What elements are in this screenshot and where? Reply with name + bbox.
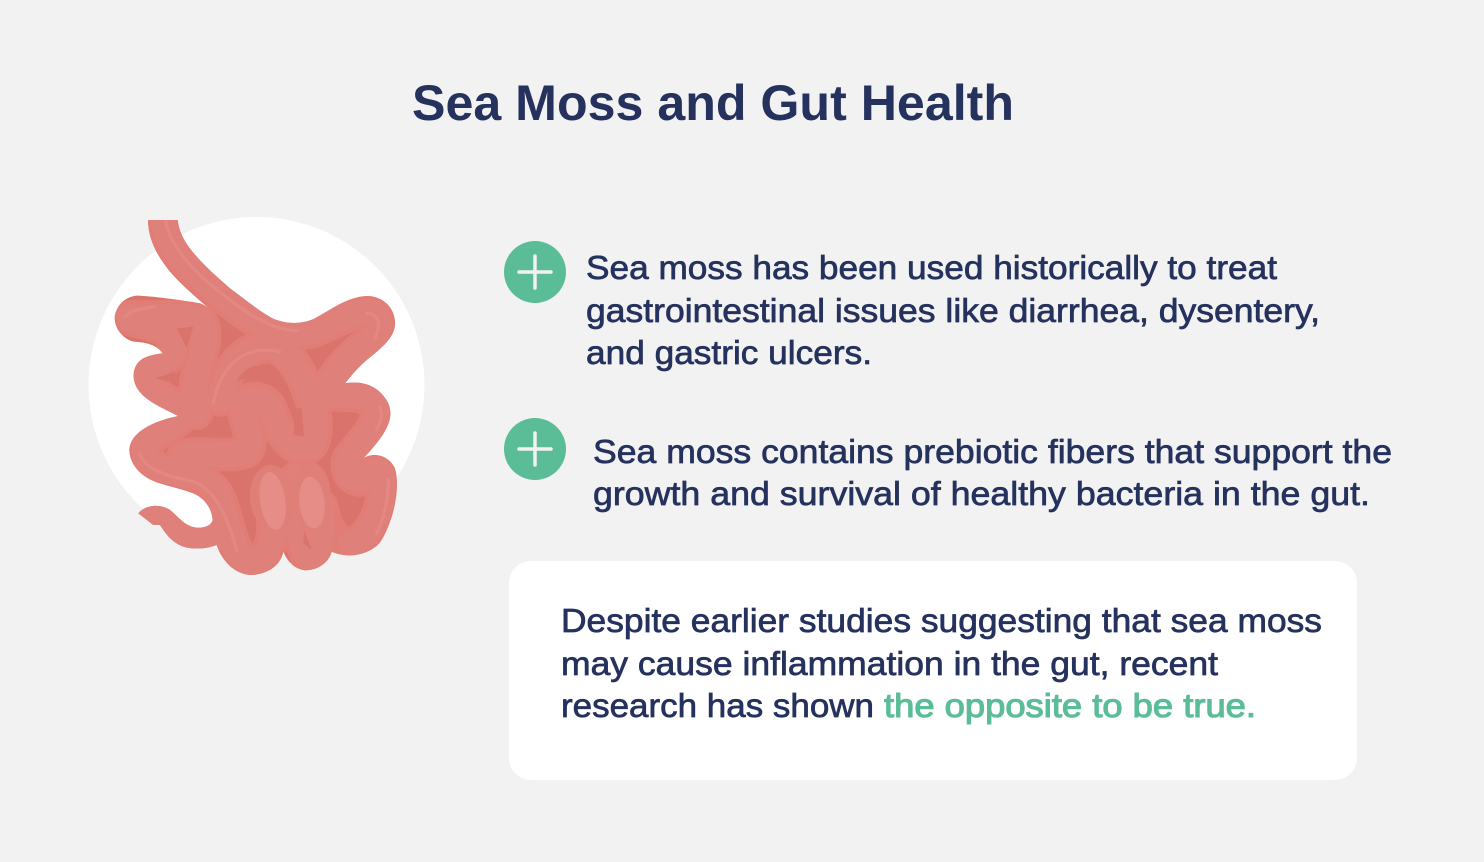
text block: prebiotic fibers: Sea moss contains prebiotic fibers that support the [593,433,1392,470]
white circle backdrop [88,217,424,553]
text block: historical use: Sea moss has been used historically to treat [586,249,1277,286]
icon: plus badge 1 [504,241,566,303]
intestine tube loops [125,217,388,562]
pale lobes [247,460,334,534]
tube rim [130,217,383,562]
illustration: intestines on white circle [88,217,424,575]
icon: small intestine [115,217,397,575]
callout text [561,602,1322,724]
text block: prebiotic fibers [593,433,1392,512]
callout text: the opposite to be true. [884,687,1256,724]
intestine silhouette [115,220,397,575]
callout text: Despite earlier studies suggesting that sea moss [561,602,1322,639]
highlights [125,222,388,550]
text block: prebiotic fibers: growth and survival of healthy bacteria in the gut. [593,475,1370,512]
callout panel [509,561,1357,780]
text block: historical use [586,249,1320,371]
tube body [138,244,380,570]
title: Sea Moss and Gut Health [412,75,1014,131]
small dark folds [155,327,312,550]
callout text: research has shown [561,687,874,724]
callout text: may cause inflammation in the gut, recent [561,645,1218,682]
text block: historical use: gastrointestinal issues like diarrhea, dysentery, [586,292,1320,329]
callout: research note [509,561,1357,780]
icon: plus badge 2 [504,418,566,480]
text block: historical use: and gastric ulcers. [586,334,872,371]
